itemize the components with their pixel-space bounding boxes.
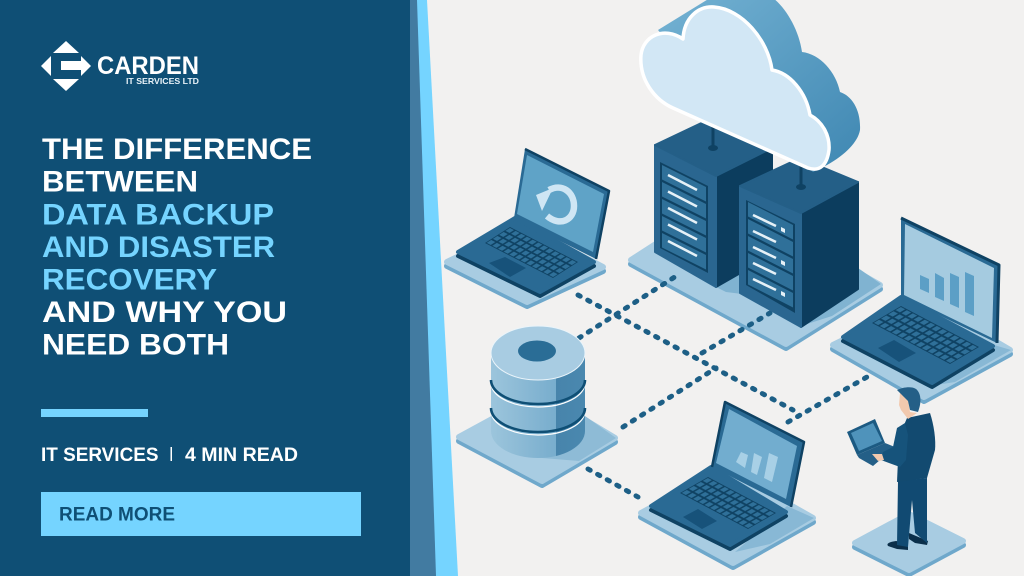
title line 2: BETWEEN (42, 166, 198, 198)
database grooves (491, 380, 585, 435)
laptop: analytics right (843, 218, 999, 387)
person hair (897, 387, 920, 412)
laptop base (843, 297, 993, 387)
connection: left laptop to person (578, 295, 793, 410)
laptop keyboard (680, 477, 776, 529)
person torso (897, 413, 935, 482)
separator (170, 447, 172, 461)
title line 1: THE DIFFERENCE (42, 133, 312, 166)
person near shoe (887, 541, 908, 550)
server 2 rack panel (746, 200, 795, 313)
person legs (897, 478, 927, 547)
meta line (41, 445, 298, 466)
server 1 body (655, 118, 772, 287)
title line 3: DATA BACKUP (42, 198, 274, 232)
logo tagline: IT SERVICES LTD (126, 76, 199, 86)
button: read more (41, 492, 361, 536)
logo (41, 41, 199, 91)
cloud connectors (708, 125, 806, 190)
cloud back (658, 0, 860, 172)
platform: right laptop (833, 300, 1011, 401)
laptop: analytics bottom (651, 402, 804, 549)
person hand (872, 454, 884, 461)
laptop screen (901, 218, 999, 343)
slanted light-blue band (417, 0, 458, 576)
laptop trackpad (683, 509, 717, 529)
dashed network connections (578, 273, 867, 497)
connection: junction to server (702, 313, 770, 353)
laptop: backup (458, 149, 609, 296)
person face (899, 393, 917, 419)
laptop base (458, 218, 594, 296)
title (42, 133, 312, 362)
title line 6: AND WHY YOU (42, 296, 287, 329)
person far shoe (909, 533, 928, 545)
server 1 rack panel (660, 162, 708, 273)
laptop screen (514, 149, 609, 259)
platform: figure (855, 514, 963, 574)
platform: bottom laptop (641, 468, 814, 567)
database body (491, 353, 585, 458)
laptop screen (712, 402, 804, 507)
platforms (447, 198, 1011, 574)
person with laptop (847, 387, 935, 550)
accent bar (41, 409, 148, 417)
connection: database to servers (579, 273, 681, 338)
slanted mid-blue band (410, 0, 437, 576)
laptop trackpad (489, 257, 526, 277)
database hole (518, 340, 556, 362)
server 2 (740, 158, 858, 327)
server 2 body (740, 158, 858, 327)
title line 7: NEED BOTH (42, 328, 229, 362)
server 1 (655, 118, 772, 287)
laptop keyboard (872, 306, 979, 364)
laptop keyboard (485, 227, 578, 278)
icon: restore arrow (536, 188, 574, 221)
platform: database (459, 393, 616, 485)
laptop trackpad (878, 340, 916, 362)
title line 5: RECOVERY (42, 264, 217, 296)
database top (491, 326, 585, 380)
platform: left laptop (447, 225, 603, 306)
laptop base (651, 467, 786, 549)
connection: database to bottom laptop (588, 469, 638, 497)
title line 4: AND DISASTER (42, 231, 275, 264)
bar chart icon (736, 452, 778, 482)
button background (41, 492, 361, 536)
logo wordmark: CARDEN (97, 52, 199, 80)
logo mark (41, 41, 91, 91)
platform: servers (631, 198, 881, 348)
bar chart icon (920, 272, 974, 316)
handheld laptop (847, 419, 895, 466)
cloud (641, 0, 860, 172)
connection: database to junction (623, 368, 716, 427)
connection: bottom laptop to right laptop (788, 377, 867, 422)
panel: left navy (0, 0, 411, 576)
button label: READ MORE (59, 504, 175, 526)
read time: 4 MIN READ (185, 445, 298, 466)
category: IT SERVICES (41, 445, 158, 466)
cloud front (641, 7, 829, 169)
database (491, 326, 585, 458)
person arm (881, 423, 908, 467)
